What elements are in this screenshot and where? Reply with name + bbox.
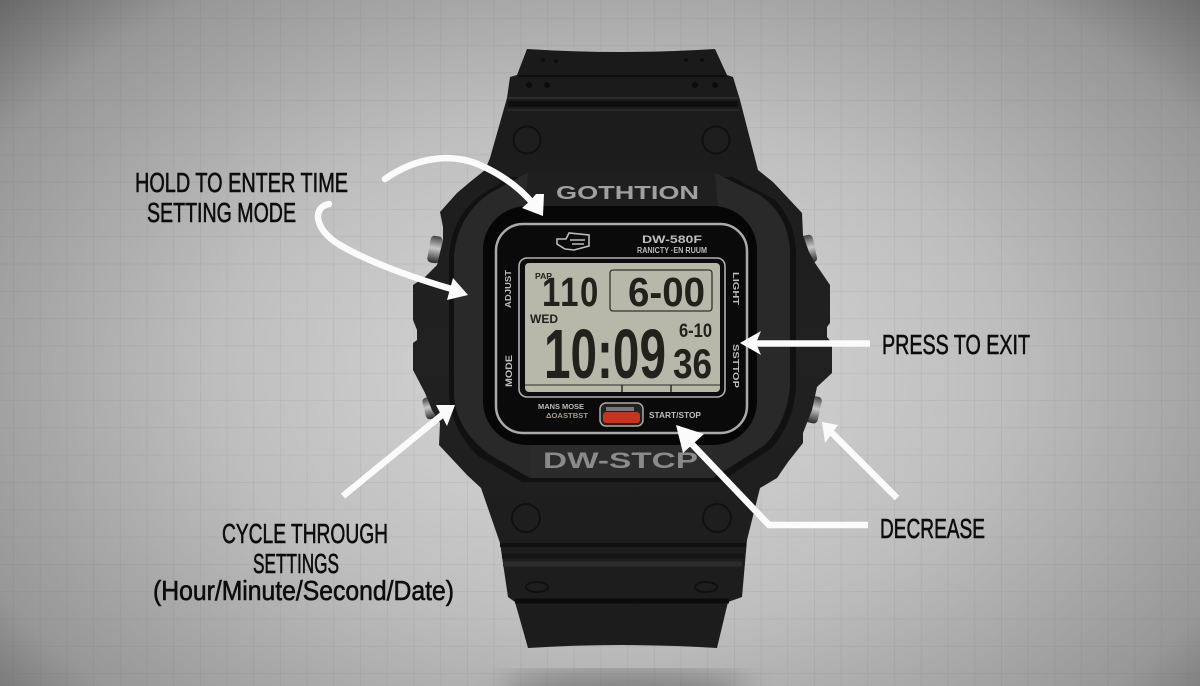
bottom nameplate <box>530 443 714 478</box>
red badge <box>600 403 643 426</box>
LCD screen <box>525 263 720 392</box>
right button labels <box>731 272 741 388</box>
LCD readouts: 36 <box>673 340 712 387</box>
top nameplate <box>525 173 718 207</box>
LCD readouts: 10:09 <box>544 315 666 393</box>
label: press to exit: PRESS TO EXIT <box>882 329 1030 360</box>
lower face labels: START/STOP <box>649 410 701 420</box>
right button labels: SSTTOP <box>731 344 741 388</box>
LCD readouts <box>525 269 720 393</box>
watch <box>413 49 832 648</box>
lower face labels: MANS MOSE <box>538 402 584 411</box>
watch strap and case silhouette <box>413 49 832 648</box>
bezel model text: DW-STCP <box>543 448 698 473</box>
lower face labels <box>538 402 701 420</box>
LCD frame <box>519 258 725 397</box>
label: hold to enter time setting mode <box>135 167 348 228</box>
lower face labels: ΔOASTBST <box>546 411 588 420</box>
strap studs <box>512 126 731 592</box>
label: cycle through settings: SETTINGS <box>253 548 339 579</box>
strap ridges <box>500 76 746 601</box>
right button labels: LIGHT <box>731 272 741 306</box>
label: hold to enter time setting mode: SETTING MODE <box>147 197 296 228</box>
arrow: to start/stop <box>676 425 868 525</box>
arrow: curved to top of bezel <box>385 158 544 216</box>
LCD readouts: 6-10 <box>679 321 712 342</box>
strap pin holes <box>526 58 718 88</box>
arrow: cycle through settings <box>343 405 455 496</box>
label: cycle through settings <box>153 518 454 606</box>
case bezel <box>454 173 790 478</box>
model text: DW-580F <box>642 234 702 246</box>
side buttons <box>422 234 823 424</box>
LCD readouts: 110 <box>542 269 600 315</box>
label: hold to enter time setting mode: HOLD TO ENTER TIME <box>135 167 348 198</box>
LCD readouts: PAP <box>535 272 553 281</box>
LCD readouts: WED <box>530 312 558 326</box>
logo icon <box>557 233 589 250</box>
ground shadow <box>500 672 750 686</box>
arrow: curved to left case <box>318 204 468 300</box>
label: cycle through settings: (Hour/Minute/Second/Date) <box>153 575 454 606</box>
left button labels <box>503 269 515 387</box>
silver face ring <box>496 224 747 433</box>
LCD readouts: 6-00 <box>628 269 705 315</box>
label: decrease: DECREASE <box>880 513 985 544</box>
left button labels: ADJUST <box>503 269 513 308</box>
left button labels: MODE <box>504 355 515 387</box>
arrow: press to exit <box>740 331 870 355</box>
sub model text: RANICTY ·EN RUUM <box>637 246 707 255</box>
case outer band <box>449 177 796 482</box>
label: cycle through settings: CYCLE THROUGH <box>222 518 388 549</box>
black face surround <box>483 206 757 445</box>
bezel brand text: GOTHTION <box>556 183 699 203</box>
arrow: decrease <box>822 422 897 498</box>
